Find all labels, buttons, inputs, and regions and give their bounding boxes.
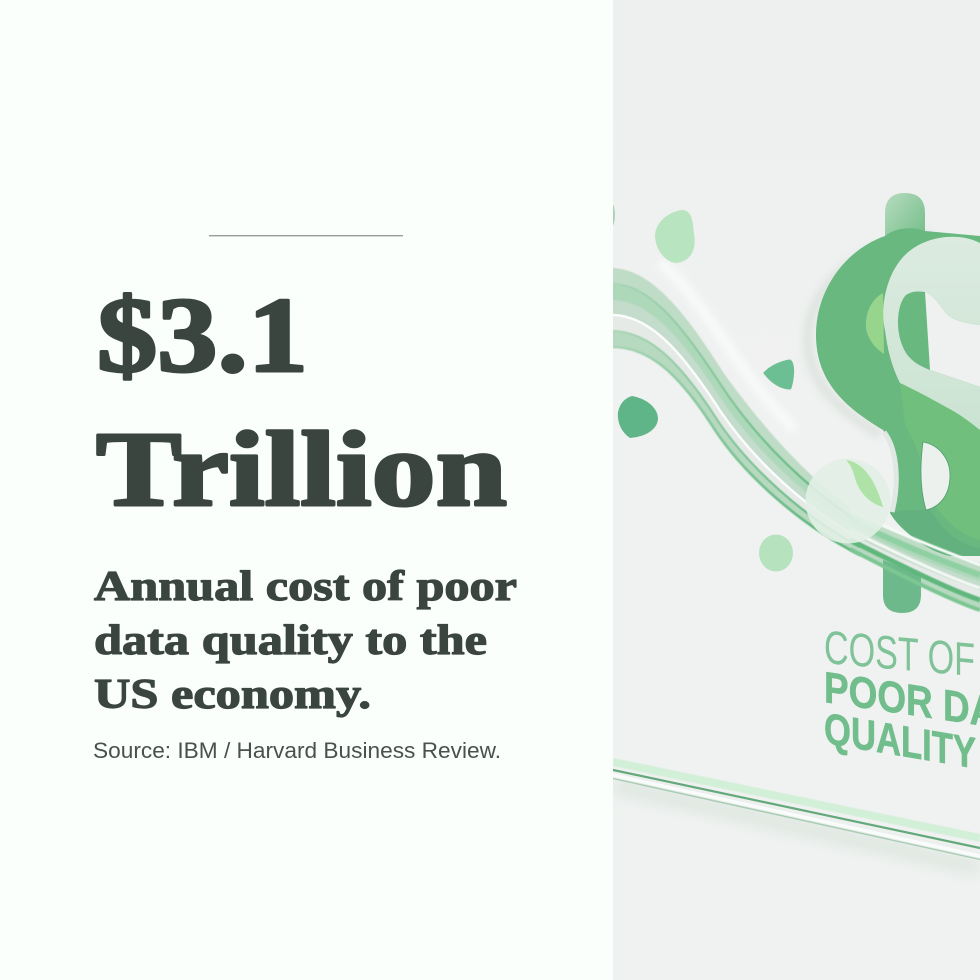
lower white counter — [921, 442, 950, 510]
ribbon edge lines — [613, 284, 860, 555]
headline: Trillion: Trillion — [96, 411, 507, 529]
divider rule — [209, 235, 403, 236]
text column — [93, 235, 517, 763]
dollar top stem — [885, 193, 925, 236]
panel background — [613, 0, 980, 562]
lime leaf in bubble — [846, 460, 883, 507]
floating blob 1 — [655, 210, 695, 263]
board lower edge — [613, 778, 980, 860]
source note: Source: IBM / Harvard Business Review. — [93, 738, 501, 763]
board shadow — [613, 785, 980, 868]
green ribbon bundle — [613, 268, 980, 628]
floating blob 4 — [759, 534, 793, 572]
ribbon shadow — [613, 350, 980, 622]
dollar shadow — [803, 264, 880, 436]
dollar bottom shade — [890, 513, 950, 556]
headline: $3.1: $3.1 — [97, 277, 308, 395]
subtitle: data quality to the — [94, 618, 487, 664]
board edge line — [613, 770, 980, 848]
subtitle — [94, 564, 517, 718]
glass bubble — [806, 458, 890, 544]
dollar bottom stem — [883, 560, 921, 613]
ribbon white highlight — [613, 314, 806, 503]
subtitle: Annual cost of poor — [94, 564, 517, 610]
board edge glow — [613, 762, 980, 838]
left rim — [884, 432, 896, 512]
foreground ribbon lines — [849, 525, 980, 612]
left panel background — [0, 0, 613, 980]
edge blob — [613, 204, 615, 226]
dollar sign — [808, 193, 980, 556]
right illustration panel — [600, 0, 980, 980]
board edge highlight — [613, 775, 980, 856]
glass front S — [883, 237, 980, 430]
ribbon glow — [664, 266, 712, 322]
subtitle: US economy. — [94, 672, 371, 718]
upper white counter — [925, 292, 980, 387]
floating blob 2 — [765, 361, 793, 388]
floating blob 3 — [618, 396, 658, 438]
upper counter lime — [866, 293, 884, 354]
dollar lower light face — [900, 383, 980, 540]
dollar back body — [816, 228, 980, 556]
